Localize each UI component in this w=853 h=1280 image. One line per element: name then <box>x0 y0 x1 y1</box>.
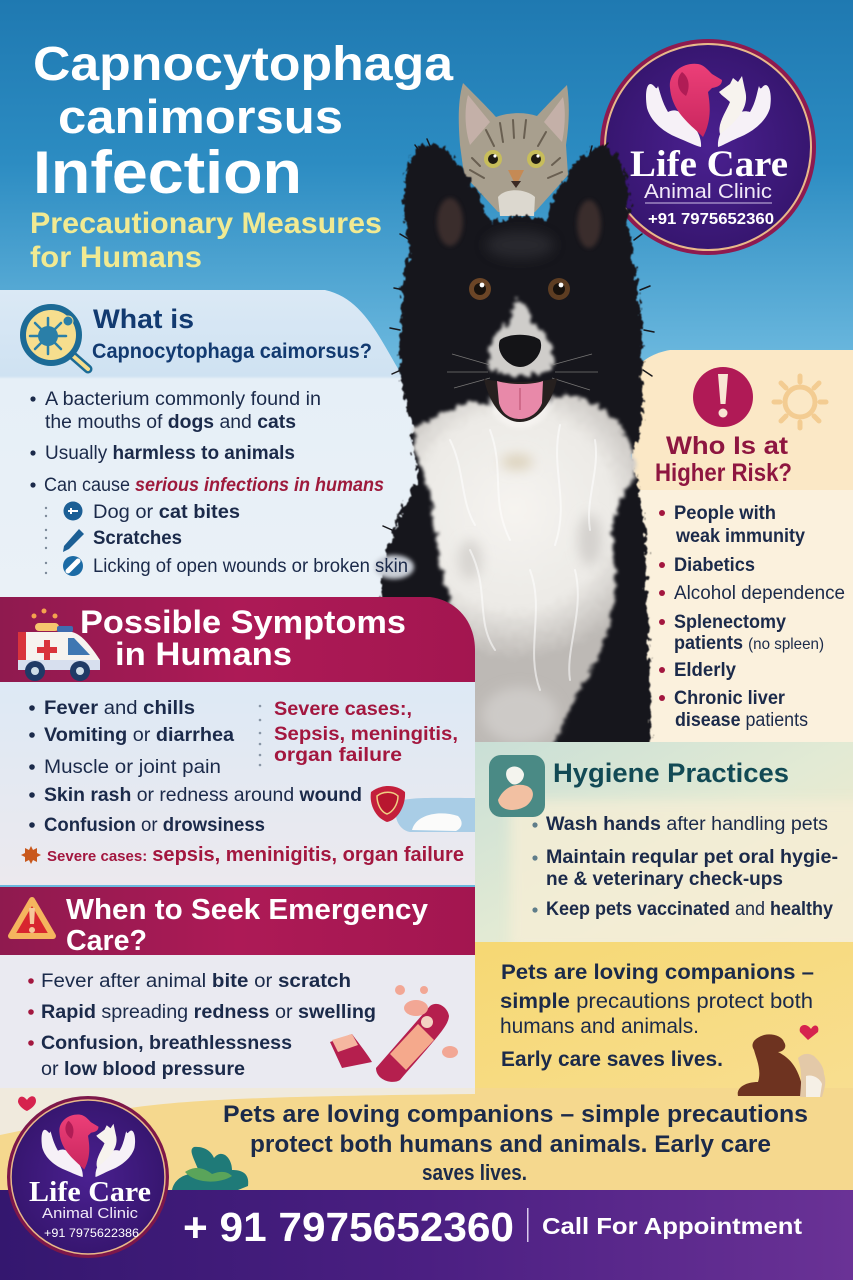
bacterium facts list: the mouths of dogs and cats <box>45 412 296 433</box>
panel: possible symptoms <box>0 597 475 885</box>
heading: what is: Capnocytophaga caimorsus? <box>92 340 372 363</box>
hygiene list: ne & veterinary check-ups <box>546 869 783 890</box>
dog fur wisps <box>379 139 654 565</box>
icon: scratch pen <box>63 529 84 552</box>
dog eyes <box>469 278 570 300</box>
dog chest wisps <box>450 425 596 690</box>
dog head highlights <box>486 231 554 259</box>
risk groups list <box>659 503 845 731</box>
risk groups list: patients (no spleen) <box>674 633 824 654</box>
logo dog and cat with hands <box>646 64 771 147</box>
severe cases side note: Sepsis, meningitis, <box>274 724 458 745</box>
logo: top clinic badge <box>600 39 816 255</box>
dog black coat <box>380 144 651 745</box>
icon: shield and wound <box>371 786 475 832</box>
logo: bottom clinic badge <box>7 1096 169 1258</box>
symptoms list: Confusion or drowsiness <box>44 815 265 836</box>
symptoms list: Skin rash or redness around wound <box>44 785 362 806</box>
risk groups list: Splenectomy <box>674 612 786 633</box>
heading: hygiene: Hygiene Practices <box>553 758 789 788</box>
icon: exclamation <box>693 367 753 427</box>
logo: bottom clinic badge: +91 7975622386 <box>44 1226 139 1240</box>
heading: who is at risk: Who Is at <box>666 432 789 460</box>
emergency list: or low blood pressure <box>41 1059 245 1080</box>
symptoms list: Muscle or joint pain <box>44 757 221 778</box>
panel: pets are companions <box>475 942 853 1092</box>
phone number: + 91 7975652360 <box>183 1204 514 1250</box>
illustration: cat <box>459 83 569 216</box>
symptoms header band <box>0 597 475 682</box>
emergency list: Confusion, breathlessness <box>41 1033 292 1054</box>
icon: heart <box>18 1096 36 1111</box>
hygiene list: Keep pets vaccinated and healthy <box>546 899 833 920</box>
icon: germ watermark <box>774 376 826 428</box>
small logo dog and cat <box>42 1115 135 1177</box>
dog ear insides <box>437 198 601 248</box>
heading: symptoms: in Humans <box>115 636 292 672</box>
call to action: Call For Appointment <box>542 1213 802 1239</box>
hygiene list: Wash hands after handling pets <box>546 814 828 835</box>
bacterium facts list: Dog or cat bites <box>93 502 240 523</box>
illustration: dog <box>379 139 654 748</box>
title block <box>30 38 453 274</box>
panel: emergency care <box>0 887 475 1092</box>
risk groups list: Elderly <box>674 660 736 681</box>
companions message <box>500 961 814 1071</box>
icon: hand washing <box>489 755 545 817</box>
companions message: simple precautions protect both <box>500 990 813 1013</box>
companions message: Pets are loving companions – <box>501 961 814 984</box>
panel: what is <box>0 290 440 597</box>
panel: who is at higher risk <box>632 350 853 742</box>
bacterium facts list: A bacterium commonly found in <box>45 389 321 410</box>
heading: symptoms <box>80 604 406 672</box>
severe cases line: Severe cases: sepsis, meninigitis, organ failure <box>47 844 464 866</box>
icon: warning triangle <box>11 900 53 936</box>
logo: top clinic badge: +91 7975652360 <box>648 211 774 228</box>
severe cases side note: Severe cases:, <box>274 699 412 720</box>
bottom message text <box>223 1101 808 1185</box>
bacterium facts list: Usually harmless to animals <box>45 443 295 464</box>
icon: bandages <box>330 985 458 1082</box>
title block: Capnocytophaga <box>33 38 453 91</box>
panel: hygiene practices <box>475 742 853 950</box>
icon: licking <box>63 556 83 576</box>
emergency header band <box>0 887 475 955</box>
icon: magnifier with bacterium <box>23 307 88 369</box>
logo: bottom clinic badge: Animal Clinic <box>42 1205 139 1222</box>
severe cases side note: organ failure <box>274 745 402 766</box>
heading: emergency: Care? <box>66 925 147 957</box>
dog whiskers <box>447 354 598 390</box>
title block: Precautionary Measures <box>30 207 382 240</box>
risk groups list: People with <box>674 503 776 524</box>
bacterium facts list <box>30 389 384 574</box>
risk groups list: Diabetics <box>674 555 755 576</box>
companions message: Early care saves lives. <box>501 1048 723 1071</box>
symptoms list <box>29 698 362 836</box>
icon: ambulance <box>18 608 100 681</box>
symptoms list: Vomiting or diarrhea <box>44 725 234 746</box>
companions message: humans and animals. <box>500 1015 699 1038</box>
dog chest fur <box>414 395 638 748</box>
emergency list <box>28 971 376 1080</box>
bottom message text: saves lives. <box>422 1160 527 1185</box>
logo: top clinic badge: Life Care <box>630 144 788 185</box>
risk groups list: weak immunity <box>675 526 805 547</box>
risk groups list: Alcohol dependence <box>674 583 845 604</box>
heading: who is at risk <box>655 432 792 487</box>
icon: bite <box>64 502 82 520</box>
icon: leaves <box>172 1147 248 1190</box>
risk groups list: disease patients <box>675 710 808 731</box>
heading: emergency: When to Seek Emergency <box>66 894 428 926</box>
dog chest shading <box>458 454 602 743</box>
emergency list: Fever after animal bite or scratch <box>41 971 351 992</box>
emergency list: Rapid spreading redness or swelling <box>41 1002 376 1023</box>
bacterium facts list: Scratches <box>93 528 182 549</box>
dog nose <box>499 335 541 367</box>
heading: symptoms: Possible Symptoms <box>80 604 406 640</box>
hygiene list <box>532 814 838 920</box>
title block: canimorsus <box>58 90 343 143</box>
hygiene list: Maintain reqular pet oral hygie- <box>546 847 838 868</box>
heading: who is at risk: Higher Risk? <box>655 459 792 487</box>
heading: what is: What is <box>93 304 194 334</box>
heading: what is <box>92 304 372 363</box>
risk groups list: Chronic liver <box>674 688 786 709</box>
heading: emergency <box>66 894 428 957</box>
severe cases side note <box>259 699 458 766</box>
dog mouth and tongue <box>484 378 557 422</box>
panel: bottom message <box>0 1088 853 1192</box>
dog muzzle <box>488 302 554 428</box>
bacterium facts list: Can cause serious infections in humans <box>44 475 384 496</box>
logo: bottom clinic badge: Life Care <box>29 1177 151 1208</box>
logo: top clinic badge: Animal Clinic <box>644 181 772 203</box>
footer band <box>0 1190 853 1280</box>
symptoms list: Fever and chills <box>44 698 195 719</box>
bottom message text: Pets are loving companions – simple precautions <box>223 1101 808 1128</box>
icon: pets with heart <box>738 1025 825 1097</box>
title block: for Humans <box>30 241 202 274</box>
bottom message text: protect both humans and animals. Early care <box>250 1131 771 1158</box>
title block: Infection <box>33 139 302 206</box>
text: licking line over dog fur: Licking of open wounds or broken skin <box>93 556 408 577</box>
